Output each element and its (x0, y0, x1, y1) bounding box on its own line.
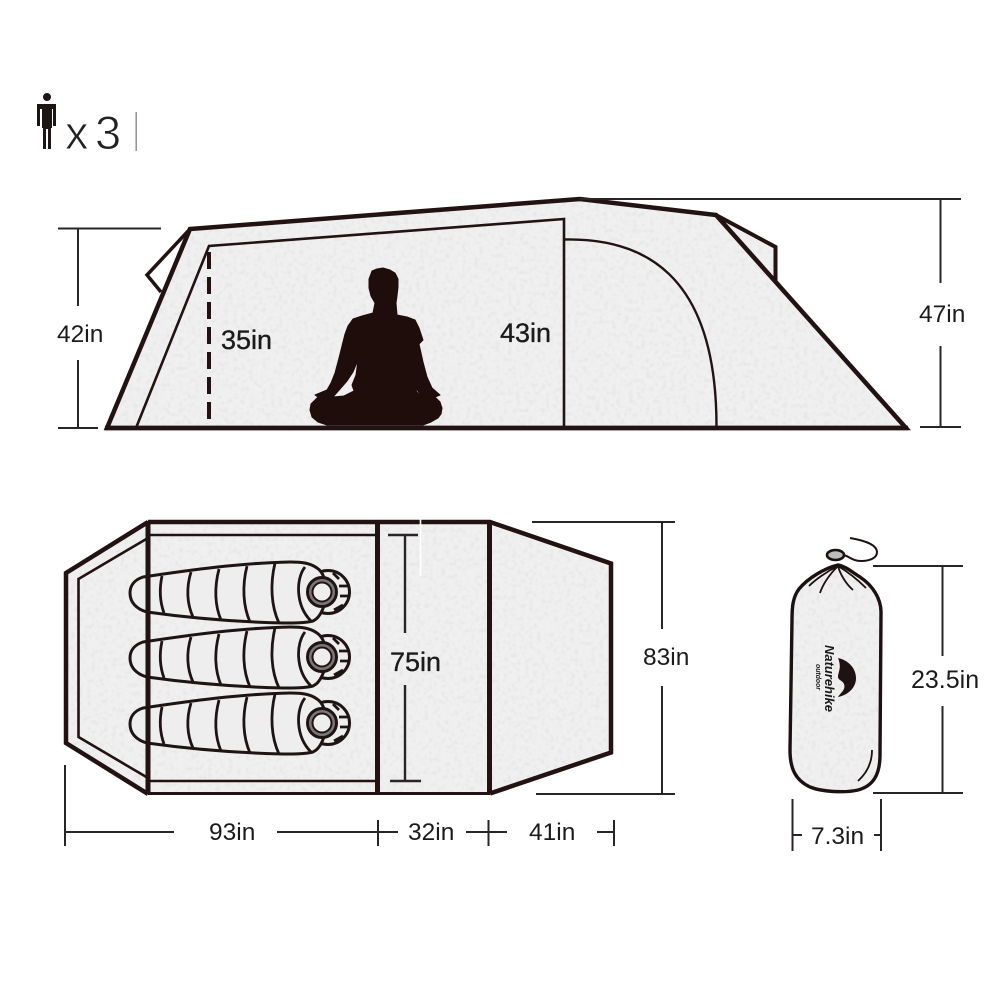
dimension: 75in (388, 535, 441, 781)
baseline (105, 426, 908, 430)
sleeping bag 1 (130, 562, 350, 623)
dimension: 41in: 41in (529, 819, 575, 846)
dimension: 23.5in: 23.5in (911, 666, 979, 694)
right vent flap (716, 215, 776, 282)
drawstring knot (827, 550, 844, 560)
tent floor outline (148, 522, 611, 794)
carry bag (790, 538, 979, 851)
dimension: 75in: 75in (390, 647, 441, 677)
icon: person x 3 capacity (37, 93, 137, 159)
bag body (790, 565, 881, 792)
dimension: 41in (529, 819, 614, 846)
seated person silhouette (310, 268, 442, 425)
dimension: 7.3in: 7.3in (811, 823, 864, 850)
floor fabric (65, 521, 612, 794)
inner partitions (148, 521, 490, 794)
inner left vestibule line (78, 538, 148, 778)
dimension: 93in: 93in (209, 819, 255, 846)
dimension: 23.5in (873, 566, 979, 793)
brand name: Naturehike (822, 645, 837, 712)
capacity text: x (65, 106, 88, 159)
top view of tent (65, 519, 689, 846)
dimension: 32in: 32in (408, 819, 454, 846)
dimension: 47in: 47in (919, 301, 965, 328)
sleeping bags (130, 562, 350, 754)
dimension: 42in: 42in (57, 321, 103, 348)
dimension: 47in (580, 199, 965, 427)
capacity text: 3 (95, 106, 121, 159)
logo mountain (838, 658, 856, 697)
icon: standing person (37, 93, 56, 149)
dimension: 83in: 83in (643, 644, 689, 671)
drawstring cord (844, 538, 877, 561)
logo (814, 645, 856, 712)
dimension: 32in (378, 819, 507, 846)
dimension: 35in: 35in (221, 325, 272, 355)
dimension: 43in: 43in (500, 318, 551, 348)
inner door outline (136, 219, 564, 428)
side view of tent (57, 199, 965, 428)
left vent flap (147, 229, 190, 292)
tent side fabric (108, 199, 906, 428)
white seam (420, 519, 422, 576)
sleeping bag 2 (130, 627, 350, 688)
tagline: outdoor (814, 664, 821, 691)
bag gathers (809, 566, 872, 781)
vestibule arc (564, 239, 717, 428)
dimension: 83in (532, 522, 689, 794)
dimension: 7.3in (792, 799, 881, 851)
dimension: 93in (65, 765, 378, 846)
dimension: 42in (57, 228, 161, 428)
dashed inner height line (207, 252, 211, 428)
sleeping bag 3 (130, 693, 350, 754)
tent side outline (107, 199, 906, 428)
